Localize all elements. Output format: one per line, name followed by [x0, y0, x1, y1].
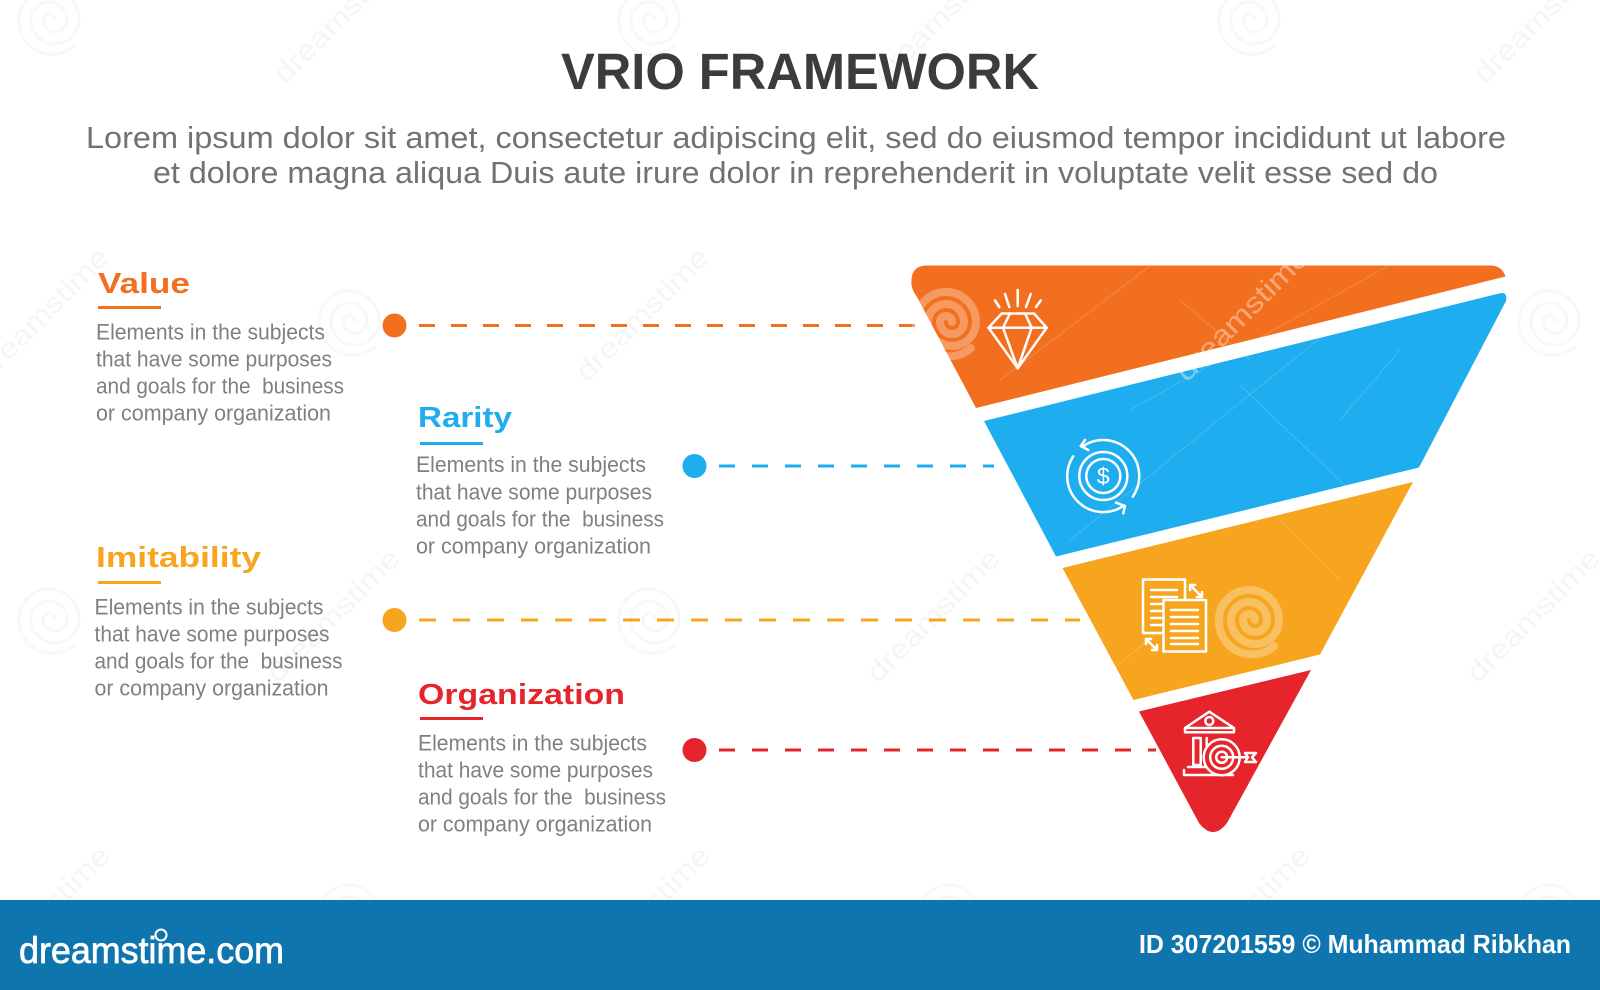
- panel: imitability description: Imitability: [96, 542, 261, 574]
- panel: value description: that have some purposes: [96, 346, 332, 372]
- connector: value: [382, 314, 921, 338]
- watermark overlay on funnel: [916, 242, 1400, 680]
- watermark: background spirals and diagonal text: dreamstime: [860, 543, 1006, 688]
- panel: rarity description: that have some purposes: [416, 480, 652, 504]
- connector: imitability: [382, 608, 1080, 632]
- segment: imitability yellow: [1062, 482, 1413, 700]
- panel: value description: [96, 268, 344, 426]
- panel: imitability description: [94, 542, 342, 700]
- subtitle text: Lorem ipsum dolor sit amet, consectetur adipiscing elit, sed do eiusmod tempor incididunt ut labore: [86, 120, 1506, 155]
- icon: diamond: [988, 290, 1047, 368]
- watermark: background spirals and diagonal text: dreamstime: [569, 242, 715, 387]
- connector: organization: [682, 738, 1156, 762]
- funnel chart: inverted pyramid: [911, 242, 1506, 832]
- panel: imitability description: and goals for the business: [94, 648, 342, 674]
- panel: value description: Elements in the subjects: [96, 320, 325, 344]
- panel: value description: or company organization: [96, 400, 331, 426]
- watermark: background spirals and diagonal text: dreamstime: [1460, 543, 1600, 688]
- watermark: background spirals and diagonal text: dreamstime: [260, 543, 406, 688]
- panel: rarity description: and goals for the business: [416, 506, 664, 532]
- icon: bank and target: [1184, 712, 1256, 775]
- segment: value orange: [911, 266, 1506, 408]
- icon: copied documents: [1143, 580, 1206, 652]
- subtitle text: [86, 120, 1506, 190]
- panel: organization description: Organization: [418, 679, 625, 711]
- panel: organization description: Elements in the subjects: [418, 730, 647, 756]
- watermark overlay on funnel: dreamstime: [1169, 242, 1315, 387]
- watermark: background spirals and diagonal text: dreamstime: [570, 840, 716, 985]
- footer credit text: ID 307201559 © Muhammad Ribkhan: [1139, 929, 1571, 959]
- subtitle text: et dolore magna aliqua Duis aute irure dolor in reprehenderit in voluptate velit esse sed do: [153, 155, 1438, 190]
- panel: organization description: or company organization: [418, 812, 652, 836]
- segment: organization red: [1139, 670, 1311, 832]
- panel: rarity description: Elements in the subjects: [416, 452, 646, 477]
- segment: rarity blue: [984, 293, 1506, 556]
- panel: imitability description: or company organization: [94, 676, 328, 700]
- panel: rarity description: [416, 402, 664, 558]
- panel: imitability description: that have some purposes: [94, 622, 330, 646]
- panel: organization description: that have some purposes: [418, 758, 653, 782]
- panel: rarity description: or company organization: [416, 534, 651, 558]
- watermark: background spirals and diagonal text: dreamstime: [1170, 840, 1316, 985]
- connector: rarity: [682, 454, 994, 478]
- panel: value description: and goals for the business: [96, 374, 344, 398]
- icon: coin with cycle arrows: $: [1097, 463, 1110, 489]
- panel: value description: Value: [98, 268, 190, 300]
- footer logo text: dreamstime.com: [19, 930, 284, 971]
- title: VRIO FRAMEWORK: [561, 43, 1039, 100]
- footer bar: [0, 900, 1600, 990]
- panel: organization description: and goals for the business: [418, 784, 666, 810]
- panel: organization description: [418, 679, 666, 836]
- panel: imitability description: Elements in the subjects: [94, 594, 324, 620]
- icon: coin with cycle arrows: [1067, 440, 1139, 513]
- panel: rarity description: Rarity: [418, 402, 512, 434]
